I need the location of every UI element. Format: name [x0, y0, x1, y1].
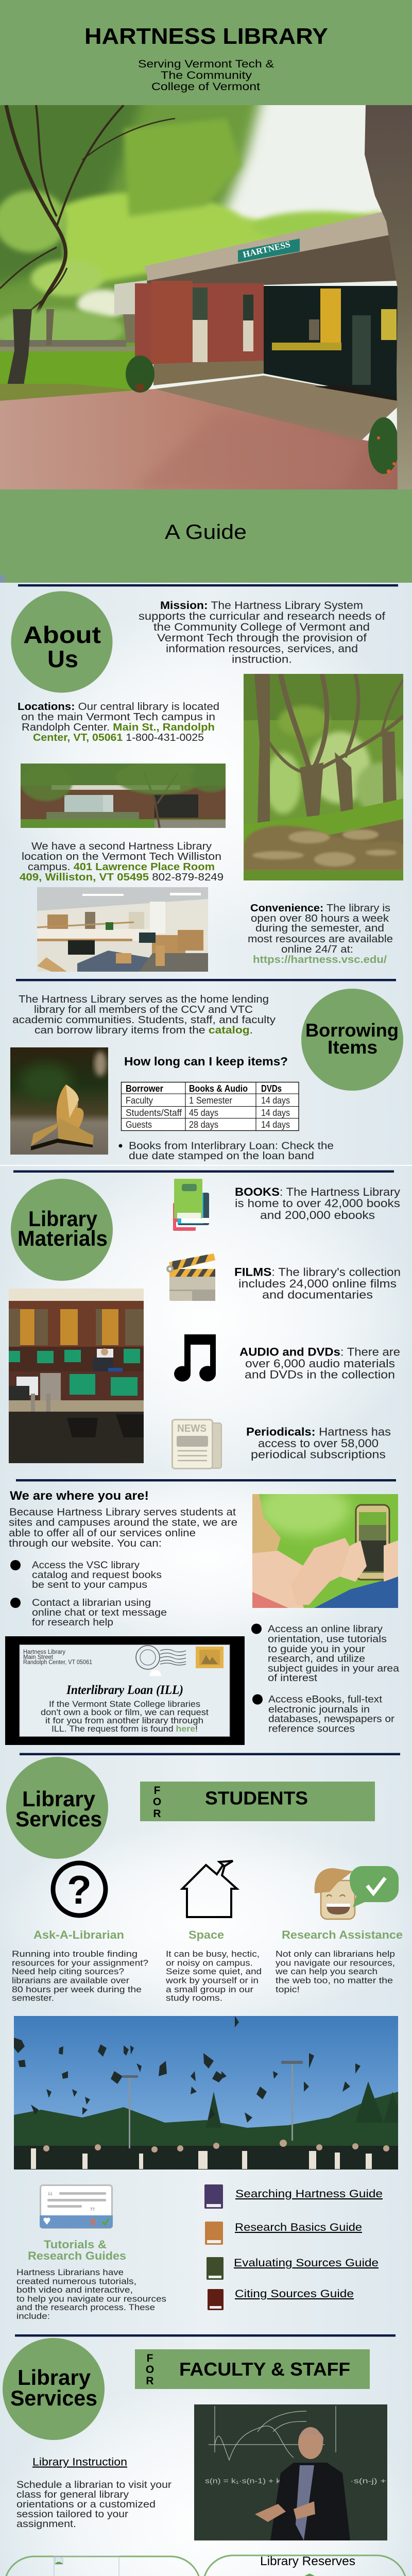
column: Ask-A-Librarian: Need help citing sources? — [12, 1967, 124, 1976]
column: Ask-A-Librarian — [12, 1928, 148, 2003]
section heading: Library Services (faculty): Services — [10, 2386, 97, 2410]
banner: for faculty and staff: R — [146, 2375, 154, 2387]
table: loan periods: 1 Semester — [189, 1095, 232, 1106]
text: mission: supports the curricular and research needs of — [139, 611, 385, 622]
table: loan periods: Borrower — [126, 1083, 163, 1094]
section heading: About Us — [11, 591, 112, 692]
text: books: is home to over 42,000 books — [235, 1197, 400, 1210]
note: interlibrary loan due date: Books from Interlibrary Loan: Check the — [129, 1141, 334, 1152]
section heading: Library Materials — [11, 1179, 113, 1281]
doors — [264, 286, 398, 399]
table: loan periods: 45 days — [189, 1108, 218, 1118]
banner: for faculty and staff: O — [146, 2364, 154, 2376]
table: loan periods: 14 days — [261, 1108, 290, 1118]
text: Williston location: We have a second Hartness Library — [31, 841, 212, 852]
icon: question mark — [53, 1863, 106, 1916]
column: Research Assistance: topic! — [276, 1985, 300, 1994]
text: periodicals: Periodicals: Hartness has — [246, 1425, 391, 1438]
broken image placeholder — [54, 2556, 119, 2576]
photo: Williston library room — [37, 887, 208, 972]
column: Ask-A-Librarian: Running into trouble finding — [12, 1949, 138, 1959]
table: loan periods: 14 days — [261, 1120, 290, 1130]
icon: tutorials card: ” — [90, 2205, 95, 2218]
text: mission — [139, 600, 385, 666]
link: Evaluating Sources Guide — [207, 2257, 379, 2280]
bulleted list: left — [10, 1560, 167, 1628]
block: Tutorials and Research Guides: to help you navigate our resources — [16, 2294, 166, 2304]
bulleted list: right: research, and utilize — [268, 1653, 365, 1664]
title: HARTNESS LIBRARY — [84, 24, 328, 49]
column: Space: It can be busy, hectic, — [166, 1949, 260, 1959]
block: Tutorials and Research Guides: Research Guides — [28, 2249, 126, 2262]
link: Searching Hartness Guide — [204, 2184, 383, 2209]
text: films: and documentaries — [262, 1288, 373, 1301]
link: Citing Sources Guide — [208, 2288, 354, 2310]
text: Williston location — [20, 841, 224, 883]
bulleted list: right — [251, 1623, 399, 1734]
block: Library Instruction: class for general library — [16, 2489, 129, 2500]
note: interlibrary loan due date: due date stamped on the loan band — [129, 1150, 314, 1162]
column: Space: a small group in our — [166, 1985, 253, 1994]
text: convenience: Convenience: The library is — [250, 903, 390, 914]
text: online services intro: Because Hartness Library serves students at — [9, 1506, 236, 1518]
section heading: About Us: Us — [47, 646, 78, 672]
body: it for you from another library through — [45, 1716, 203, 1725]
heading: Interlibrary Loan (ILL) — [66, 1683, 183, 1697]
heading: How long can I keep items?: How long can I keep items? — [124, 1055, 288, 1068]
text: online services intro: able to offer all of our services online — [9, 1528, 196, 1539]
banner: for students: F — [154, 1785, 161, 1797]
block: Tutorials and Research Guides: created numerous tutorials, — [16, 2276, 136, 2286]
column: Research Assistance: you navigate our resources, — [276, 1958, 395, 1968]
photo: Randolph campus library building — [21, 764, 226, 828]
column: Research Assistance: we can help you search — [275, 1967, 377, 1976]
text: films: includes 24,000 online films — [238, 1277, 397, 1290]
address: Main Street — [23, 1654, 54, 1660]
header band — [0, 0, 412, 105]
icon: stacked books — [284, 2573, 329, 2576]
photo: professor at chalkboard — [194, 2404, 387, 2540]
bulleted list: right: Access an online library — [268, 1623, 383, 1635]
text: films: FILMS : The library's collection — [234, 1265, 401, 1279]
bulleted list: right: to guide you in your — [268, 1643, 366, 1655]
bulleted list: left: Contact a librarian using — [32, 1597, 151, 1608]
text: lending intro: library for all members of the CCV and VTC — [34, 1004, 253, 1015]
page background — [0, 583, 412, 2576]
text: locations: Randolph Center. Main St., Randolph — [22, 722, 215, 733]
divider — [18, 584, 398, 586]
white half circle — [149, 1670, 161, 1676]
block: Tutorials and Research Guides — [16, 2238, 166, 2321]
body — [41, 1700, 209, 1734]
photo: library computer lab — [9, 1289, 144, 1463]
photo: child using phone — [252, 1494, 398, 1608]
bulleted list: right: orientation, use tutorials — [268, 1633, 387, 1645]
text: locations — [18, 701, 219, 743]
block: Library Instruction: Schedule a librarian to visit your — [16, 2479, 172, 2490]
text: Williston location: location on the Vermont Tech Williston — [22, 851, 221, 862]
section heading: Library Services (students) — [6, 1757, 108, 1859]
banner: for faculty and staff — [135, 2349, 370, 2389]
text: lending intro: The Hartness Library serves as the home lending — [19, 994, 269, 1005]
section heading: Library Services (students): Library — [22, 1787, 96, 1811]
block: Library Instruction: assignment. — [16, 2518, 76, 2530]
sign — [238, 239, 300, 262]
column: Space: Space — [188, 1928, 224, 1941]
text: mission: information resources, services, and — [166, 643, 358, 655]
banner: A Guide — [0, 489, 412, 583]
text: periodicals — [246, 1425, 391, 1461]
sign: HARTNESS — [242, 239, 291, 260]
bulleted list: right: subject guides in your area — [268, 1663, 399, 1674]
column: Research Assistance: Not only can librarians help — [276, 1949, 395, 1959]
text: books: and 200,000 ebooks — [260, 1209, 375, 1222]
text: online services intro: sites and campuses around the state, we are — [9, 1517, 237, 1528]
bulleted list: right: reference sources — [268, 1723, 355, 1734]
table: loan periods: 14 days — [261, 1095, 290, 1106]
bulleted list: right: databases, newspapers or — [268, 1714, 395, 1725]
banner: for students: STUDENTS — [205, 1788, 308, 1808]
heading: We are where you are!: We are where you are! — [10, 1489, 149, 1503]
column: Ask-A-Librarian: semester. — [12, 1993, 54, 2003]
text: convenience: online 24/7 at: — [281, 944, 353, 955]
column: Ask-A-Librarian: resources for your assignment? — [12, 1958, 148, 1968]
text: periodicals: access to over 58,000 — [258, 1437, 379, 1450]
icon: tutorials card: “ — [47, 2190, 53, 2202]
icon: smiling researcher with check bubble — [315, 1866, 399, 1919]
section heading: About Us: About — [23, 621, 101, 648]
banner: for students — [140, 1782, 375, 1821]
text: mission: Mission: The Hartness Library System — [160, 600, 363, 612]
address: Hartness Library — [23, 1649, 65, 1655]
body: don't own a book or film, we can request — [41, 1708, 209, 1717]
column: Space: work by yourself or in — [165, 1975, 259, 1986]
link: Research Basics Guide: Research Basics Guide — [235, 2222, 362, 2233]
divider — [16, 1479, 396, 1482]
block: Library Instruction: orientations or a customized — [16, 2499, 156, 2510]
bulleted list: left: online chat or text message — [32, 1607, 167, 1618]
column: Research Assistance: Research Assistance — [282, 1928, 403, 1941]
column: Space: Seize some quiet, and — [166, 1967, 262, 1976]
text: mission: instruction. — [232, 653, 292, 666]
panel: interlibrary loan envelope — [5, 1636, 245, 1745]
section heading: Borrowing Items: Items — [328, 1037, 377, 1058]
block: Tutorials and Research Guides: and the research process. These — [16, 2302, 155, 2312]
text: locations: Locations: Our central library is located — [18, 701, 219, 713]
bulleted list: right: Access eBooks, full-text — [268, 1694, 383, 1705]
text: locations: on the main Vermont Tech campus in — [21, 711, 215, 723]
photo: professor at chalkboard: s(n) = k₁·s(n-1) + k₂· — [205, 2477, 287, 2485]
banner: for faculty and staff: FACULTY & STAFF — [179, 2359, 350, 2380]
block: Tutorials and Research Guides: include: — [16, 2311, 50, 2321]
column: Space: or noisy on campus. — [166, 1958, 253, 1968]
photo: professor at chalkboard: ·s(n-j) + — [350, 2477, 386, 2485]
section heading: Library Services (students): Services — [15, 1807, 102, 1831]
body: ILL. The request form is found here! — [52, 1724, 198, 1734]
text: lending intro: can borrow library items from the catalog . — [35, 1025, 253, 1036]
column: Research Assistance — [275, 1928, 403, 1994]
text: audio and DVDs: AUDIO and DVDs : There are — [239, 1346, 400, 1358]
table: loan periods: Students/Staff — [126, 1108, 182, 1118]
divider — [16, 979, 396, 981]
text: convenience — [248, 903, 393, 965]
text: films — [234, 1265, 401, 1301]
text: convenience: most resources are available — [248, 934, 393, 945]
stamp — [196, 1647, 224, 1668]
section heading: Library Services (faculty): Library — [18, 2365, 91, 2389]
address — [23, 1649, 92, 1666]
column: Space: study rooms. — [166, 1993, 222, 2003]
bulleted list: left: for research help — [32, 1617, 113, 1628]
panel: Moodle integration — [4, 2556, 201, 2576]
divider — [20, 1753, 400, 1755]
text: Williston location: 409, Williston, VT 05495 802-879-8249 — [20, 872, 224, 883]
roof — [144, 209, 407, 281]
banner: for faculty and staff: F — [147, 2352, 153, 2364]
text: convenience: https://hartness.vsc.edu/ — [253, 954, 387, 965]
section heading: Borrowing Items: Borrowing — [305, 1020, 399, 1041]
block: Library Instruction: Library Instruction — [32, 2456, 127, 2468]
text: convenience: during the semester, and — [255, 923, 384, 934]
table: loan periods: 28 days — [189, 1120, 218, 1130]
link: Citing Sources Guide: Citing Sources Guide — [235, 2288, 354, 2300]
block: Tutorials and Research Guides: both video and interactive, — [16, 2285, 133, 2295]
text: audio and DVDs: and DVDs in the collection — [245, 1368, 395, 1381]
shrubs — [126, 355, 154, 393]
section heading: Library Services (faculty) — [3, 2338, 105, 2440]
bulleted list: right: of interest — [268, 1672, 318, 1684]
icon: stack of books — [173, 1179, 209, 1231]
banner: for students: O — [153, 1796, 161, 1808]
brick walls — [135, 283, 264, 364]
column: Research Assistance: the web too, no matter the — [276, 1975, 393, 1986]
subtitle — [138, 58, 274, 93]
table: loan periods: Faculty — [126, 1095, 153, 1106]
block: Library Instruction: session tailored to your — [16, 2509, 129, 2520]
address: Randolph Center, VT 05061 — [23, 1659, 92, 1666]
subtitle: Serving Vermont Tech & — [138, 58, 274, 70]
body: If the Vermont State College libraries — [49, 1700, 200, 1709]
text: Williston location: campus. 401 Lawrence Place Room — [28, 861, 215, 873]
link: Research Basics Guide — [205, 2222, 362, 2245]
hero photo: Hartness Library entrance — [0, 105, 412, 489]
text: periodicals: periodical subscriptions — [251, 1448, 386, 1461]
bulleted list: left: be sent to your campus — [32, 1579, 147, 1590]
text: lending intro — [12, 994, 276, 1036]
subtitle: The Community — [161, 70, 252, 81]
panel: Library Reserves — [203, 2554, 407, 2576]
paving — [0, 389, 398, 489]
table: loan periods: Books & Audio — [189, 1083, 248, 1094]
banner: A Guide: A Guide — [165, 521, 247, 544]
icon: newspaper: NEWS — [177, 1423, 207, 1434]
banner: for students: R — [153, 1808, 161, 1820]
text: online services intro — [9, 1506, 237, 1549]
text: books: BOOKS : The Hartness Library — [235, 1185, 400, 1198]
bulleted list: right: electronic journals in — [268, 1704, 370, 1715]
bulleted list: left: catalog and request books — [32, 1569, 162, 1581]
block: Library Instruction — [16, 2456, 172, 2530]
icon: tutorials card — [40, 2185, 113, 2228]
subtitle: College of Vermont — [151, 81, 260, 93]
block: Tutorials and Research Guides: Tutorials & — [44, 2238, 107, 2251]
column: Space — [165, 1928, 262, 2003]
postmark — [136, 1646, 186, 1669]
lawn — [0, 351, 135, 412]
text: mission: Vermont Tech through the provision of — [157, 632, 367, 644]
panel: Library Reserves: Library Reserves — [260, 2554, 355, 2568]
table: loan periods: Guests — [126, 1120, 152, 1130]
icon: question mark: ? — [67, 1867, 92, 1912]
text: locations: Center, VT, 05061 1-800-431-0025 — [33, 732, 204, 743]
divider — [15, 2334, 396, 2337]
photo: graduates tossing caps — [14, 2016, 398, 2170]
note: interlibrary loan due date — [118, 1141, 334, 1162]
text: books — [235, 1185, 400, 1222]
section heading: Library Materials: Materials — [18, 1226, 108, 1250]
icon: newspaper — [172, 1420, 221, 1468]
photo: open book — [10, 1047, 108, 1155]
bulleted list: left: Access the VSC library — [32, 1560, 140, 1571]
text: audio and DVDs — [239, 1346, 400, 1381]
column: Ask-A-Librarian: 80 hours per week during the — [12, 1985, 142, 1994]
text: mission: the Community College of Vermont and — [153, 621, 370, 633]
icon: music note — [174, 1334, 216, 1382]
text: online services intro: through our website. You can: — [9, 1538, 162, 1549]
text: audio and DVDs: over 6,000 audio materials — [245, 1357, 395, 1370]
table: loan periods: DVDs — [261, 1083, 282, 1094]
divider — [13, 1171, 394, 1173]
link: Searching Hartness Guide: Searching Hartness Guide — [235, 2188, 383, 2200]
column: Ask-A-Librarian: Ask-A-Librarian — [33, 1928, 124, 1941]
icon: film clapperboard — [166, 1253, 215, 1301]
icon: house — [182, 1861, 237, 1917]
link: Evaluating Sources Guide: Evaluating Sources Guide — [234, 2257, 379, 2269]
text: convenience: open over 80 hours a week — [251, 913, 389, 924]
section heading: Library Materials: Library — [28, 1207, 98, 1231]
photo: trees and stone wall — [244, 674, 403, 880]
table: loan periods — [121, 1082, 299, 1130]
right tree trunk — [365, 105, 412, 489]
column: Ask-A-Librarian: librarians are available over — [12, 1975, 129, 1986]
section heading: Borrowing Items — [301, 989, 403, 1091]
block: Tutorials and Research Guides: Hartness Librarians have — [16, 2267, 124, 2277]
text: lending intro: academic communities. Students, staff, and faculty — [12, 1014, 276, 1026]
